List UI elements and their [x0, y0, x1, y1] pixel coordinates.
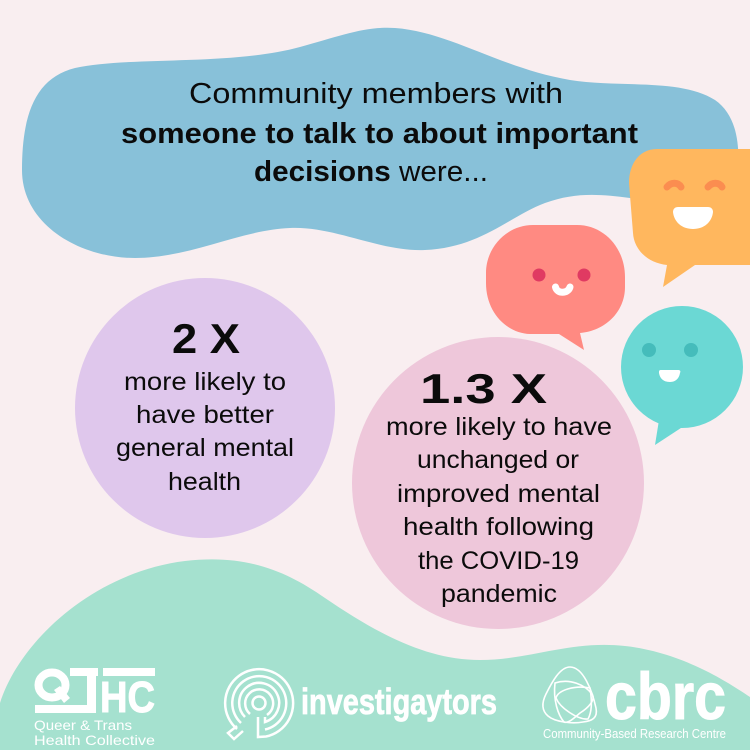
stat description: pandemic: [441, 580, 557, 608]
stat description: more likely to: [124, 368, 286, 396]
heading: someone to talk to about important: [121, 118, 638, 150]
heading: Community members with: [189, 78, 563, 110]
logo: investigaytors: [225, 669, 497, 739]
heading: [121, 78, 638, 188]
stat description: more likely to have: [386, 413, 612, 441]
logo: cbrc: [543, 659, 726, 741]
stat description: [116, 368, 294, 496]
stat description: have better: [136, 401, 274, 429]
stat description: the COVID-19: [418, 547, 579, 575]
panel: pink stat circle: [352, 337, 644, 629]
icon: teal speech bubble: [621, 306, 743, 445]
panel: purple stat circle: [75, 278, 335, 538]
stat: 1.3 X: 1.3 X: [420, 365, 547, 412]
icon: orange speech bubble: [629, 149, 750, 287]
stat description: health following: [403, 513, 594, 541]
green footer blob panel: [0, 559, 750, 750]
stat: 2 X: 2 X: [172, 315, 240, 362]
logo: QTHC: Queer & Trans: [34, 717, 132, 733]
logo: QTHC: Health Collective: [34, 732, 155, 748]
logo: cbrc: Community-Based Research Centre: [543, 726, 726, 741]
logo: cbrc: cbrc: [605, 659, 726, 733]
stat description: health: [168, 468, 241, 496]
logo: QTHC: HC: [100, 673, 155, 722]
stat description: general mental: [116, 434, 294, 462]
stat description: unchanged or: [417, 446, 579, 474]
blue blob panel: [22, 28, 738, 258]
heading: decisions were...: [254, 156, 488, 188]
stat description: [386, 413, 612, 608]
logo: QTHC: [34, 668, 155, 748]
stat description: improved mental: [397, 480, 600, 508]
icon: red speech bubble: [486, 225, 625, 350]
logo: investigaytors: investigaytors: [301, 681, 497, 722]
